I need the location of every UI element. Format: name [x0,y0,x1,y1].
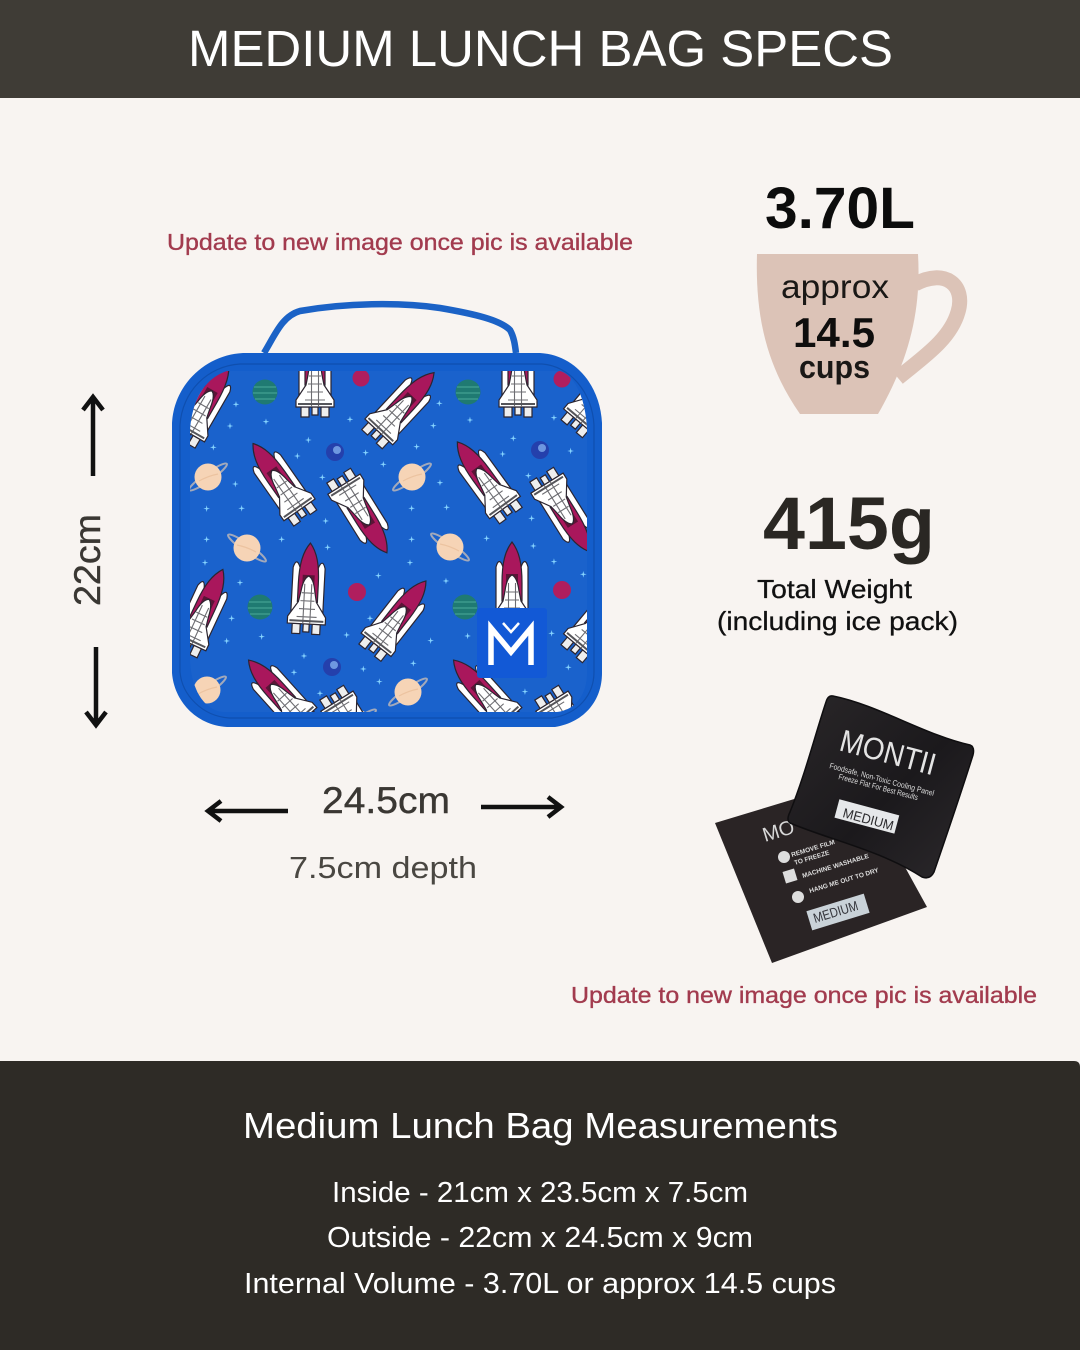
back sheet: MEDIUM [811,898,860,926]
mug text: approx [781,268,890,305]
inside measurement: Inside - 21cm x 23.5cm x 7.5cm [332,1177,748,1209]
front pack: Foodsafe, Non-Toxic Cooling Panel [828,761,935,798]
panel heading: Medium Lunch Bag Measurements [243,1105,838,1146]
front pack: MONTII [836,723,940,782]
arrow left [208,801,288,821]
arrow right [481,797,561,817]
stars [202,400,587,727]
weight figure: 415g [763,482,935,565]
rockets [190,371,587,712]
back sheet: TO FREEZE [794,849,831,867]
outside measurement: Outside - 22cm x 24.5cm x 9cm [327,1222,753,1254]
weight caption: (including ice pack) [717,606,958,636]
bag body [172,353,602,727]
front pack: MEDIUM [841,805,895,833]
depth label: 7.5cm depth [289,850,477,885]
back sheet: MACHINE WASHABLE [802,853,871,880]
arrow down [86,647,106,725]
ice pack photo [715,696,974,963]
front pack: Freeze Flat For Best Results [837,772,919,802]
dimension: width 24.5cm [208,780,561,821]
icon: mug: cups [799,349,870,385]
bag logo badge [477,608,547,678]
note: update image (top): Update to new image once pic is available [167,229,633,255]
height label: 22cm [67,514,108,606]
width label: 24.5cm [322,780,450,821]
icon: mug: 14.5 [793,309,875,356]
back sheet: HANG ME OUT TO DRY [809,867,880,895]
header bar [0,0,1080,98]
volume figure: 3.70L [765,176,915,241]
measurements panel [0,1061,1080,1350]
bag handle [264,304,516,353]
internal volume: Internal Volume - 3.70L or approx 14.5 cups [244,1268,836,1300]
back sheet [715,780,927,963]
planets [186,370,571,739]
bag pattern [190,371,587,712]
icon: mug [757,254,960,414]
back sheet: MO [760,816,797,847]
note: update image (bottom): Update to new image once pic is available [571,982,1037,1008]
arrow up [83,397,103,476]
title: MEDIUM LUNCH BAG SPECS [188,20,893,77]
dimension: height 22cm [67,397,108,725]
weight caption [717,574,958,636]
weight caption: Total Weight [757,574,913,604]
front pack [788,696,974,878]
lunch bag illustration [172,300,602,727]
back sheet: REMOVE FILM [791,839,836,859]
